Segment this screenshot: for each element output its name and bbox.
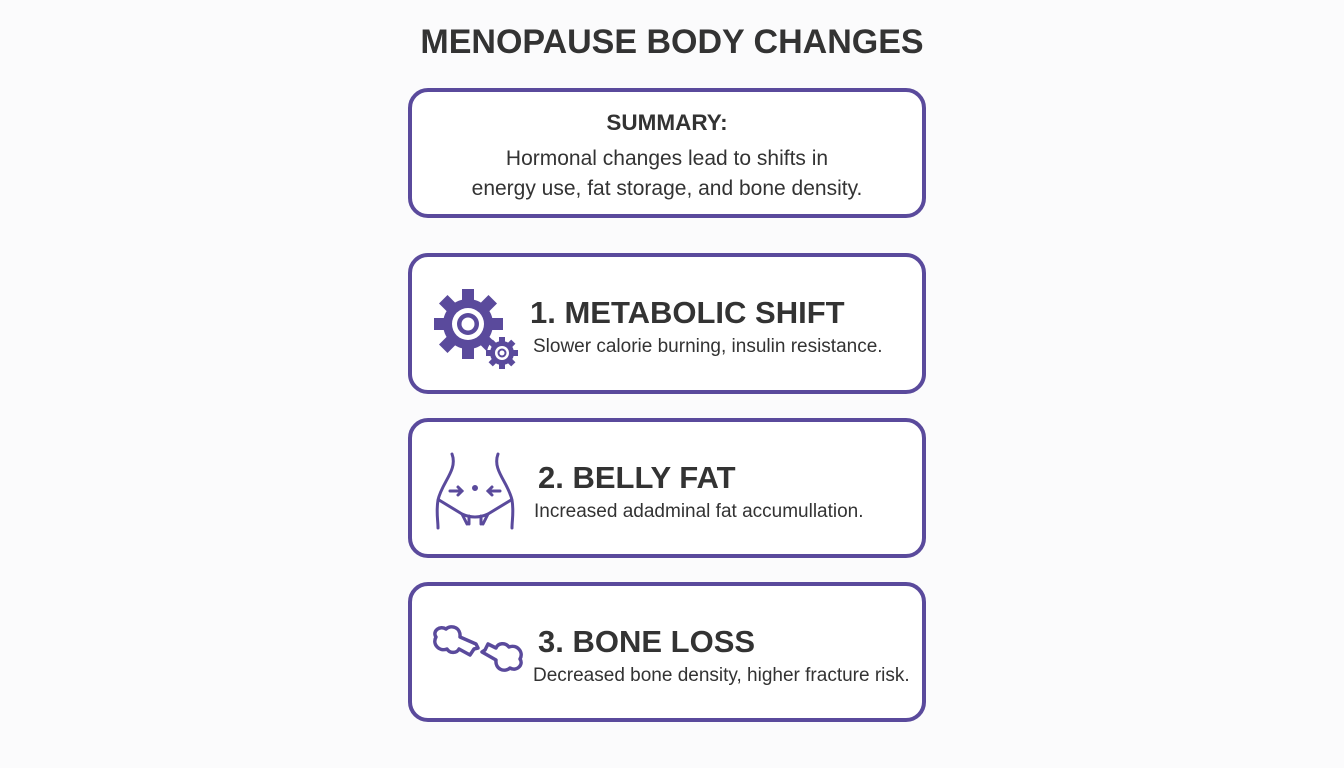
panel: summary bbox=[408, 88, 926, 218]
heading 3: 3. BONE LOSS bbox=[538, 624, 755, 659]
icon: waist bbox=[436, 452, 514, 530]
summary text bbox=[472, 147, 862, 200]
icon: broken bone bbox=[433, 625, 523, 672]
heading 1: 1. METABOLIC SHIFT bbox=[530, 295, 845, 330]
panel: belly fat bbox=[408, 418, 926, 558]
description 3: Decreased bone density, higher fracture risk. bbox=[533, 665, 910, 686]
icon: gears bbox=[434, 289, 518, 369]
heading 2: 2. BELLY FAT bbox=[538, 460, 736, 495]
panel: bone loss bbox=[408, 582, 926, 722]
title: MENOPAUSE BODY CHANGES bbox=[420, 23, 924, 61]
description 1: Slower calorie burning, insulin resistance. bbox=[533, 336, 883, 357]
panel: metabolic shift bbox=[408, 253, 926, 394]
summary text: energy use, fat storage, and bone density. bbox=[472, 177, 862, 200]
summary heading: SUMMARY: bbox=[606, 110, 728, 135]
summary text: Hormonal changes lead to shifts in bbox=[506, 147, 828, 170]
description 2: Increased adadminal fat accumullation. bbox=[534, 501, 864, 522]
